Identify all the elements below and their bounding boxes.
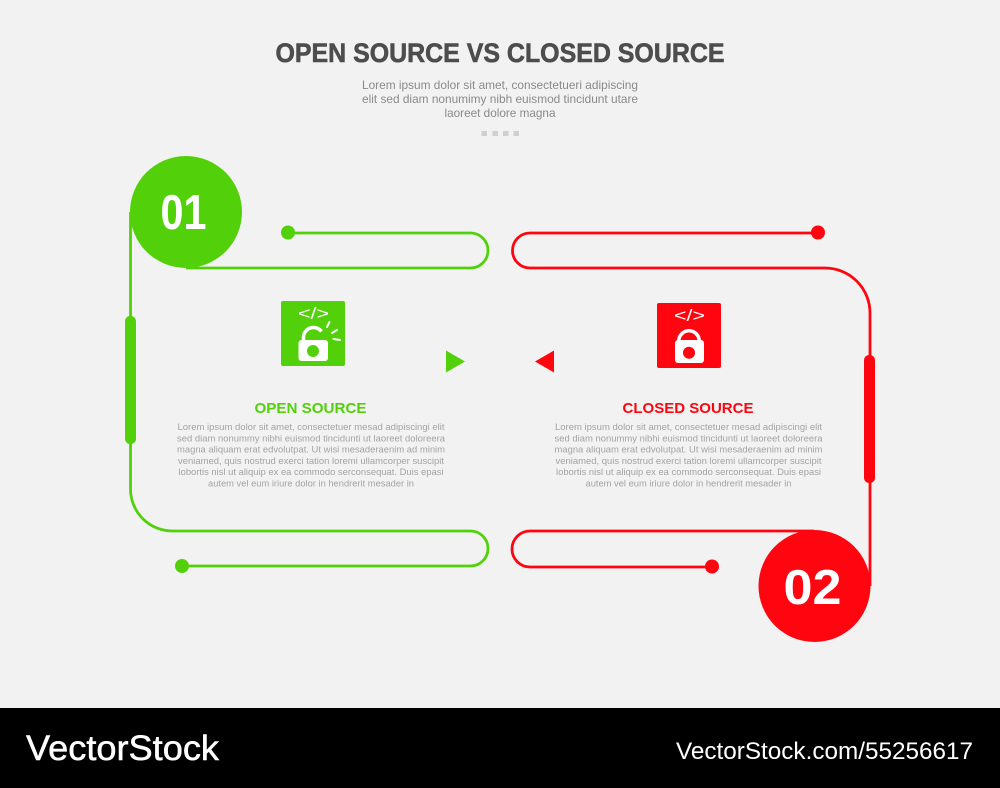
panel: closed source frame: [512, 226, 875, 642]
green thick bar: [125, 316, 136, 444]
red thick bar: [864, 355, 875, 483]
green connector line: [130, 212, 488, 566]
green line end dots: [281, 226, 295, 240]
title separator dots: [482, 131, 519, 136]
arrow: red pointing left: [535, 350, 554, 372]
footer url: VectorStock.com/55256617: [676, 738, 973, 765]
text block: closed source: autem vel eum iriure dolor in hendrerit mesader in: [586, 478, 792, 490]
text block: open source: [177, 422, 446, 490]
red connector line: [512, 233, 870, 586]
icon: closed padlock with code tag: [657, 303, 721, 368]
icon: open padlock with code tag: [281, 301, 345, 366]
subtitle text: laoreet dolore magna: [444, 106, 556, 120]
text block: closed source: [554, 422, 823, 490]
text block: closed source: magna aliquam erat edvolutpat. Ut wisi mesaderaenim ad minim: [554, 445, 823, 456]
subtitle text: elit sed diam nonumimy nibh euismod tincidunt utare: [362, 92, 638, 106]
text block: open source: Lorem ipsum dolor sit amet, consectetuer mesad adipiscingi elit: [178, 422, 445, 433]
text block: open source: lobortis nisl ut aliquip ex ea commodo serconsequat. Duis epasi: [178, 467, 444, 478]
heading: closed source: CLOSED SOURCE: [622, 400, 754, 417]
title: OPEN SOURCE VS CLOSED SOURCE: [276, 38, 724, 68]
footer logo: VectorStock: [26, 729, 220, 768]
text block: open source: veniamed, quis nostrud exerci tation loremi ullamcorper suscipit: [178, 456, 444, 467]
panel: open source frame: [125, 156, 488, 573]
text block: closed source: Lorem ipsum dolor sit amet, consectetuer mesad adipiscingi elit: [555, 422, 822, 433]
red line end dots: [811, 226, 825, 240]
icon: closed padlock with code tag: </>: [674, 306, 705, 325]
badge 01: [130, 156, 242, 268]
footer bar: [0, 708, 1000, 788]
subtitle text: [362, 78, 638, 120]
badge 01: 01: [160, 186, 206, 240]
badge 02: [758, 530, 870, 642]
subtitle text: Lorem ipsum dolor sit amet, consectetueri adipiscing: [362, 78, 638, 92]
badge 02: 02: [784, 561, 842, 615]
heading: open source: OPEN SOURCE: [254, 400, 366, 417]
text block: closed source: sed diam nonummy nibhi euismod tincidunti ut laoreet doloreera: [554, 433, 823, 444]
text block: closed source: veniamed, quis nostrud exerci tation loremi ullamcorper suscipit: [556, 456, 822, 467]
arrow: green pointing right: [446, 350, 465, 372]
text block: open source: magna aliquam erat edvolutpat. Ut wisi mesaderaenim ad minim: [177, 445, 445, 456]
text block: open source: autem vel eum iriure dolor in hendrerit mesader in: [208, 478, 414, 490]
icon: open padlock with code tag: </>: [298, 304, 329, 323]
text block: open source: sed diam nonummy nibhi euismod tincidunti ut laoreet doloreera: [177, 433, 446, 444]
text block: closed source: lobortis nisl ut aliquip ex ea commodo serconsequat. Duis epasi: [556, 467, 821, 478]
